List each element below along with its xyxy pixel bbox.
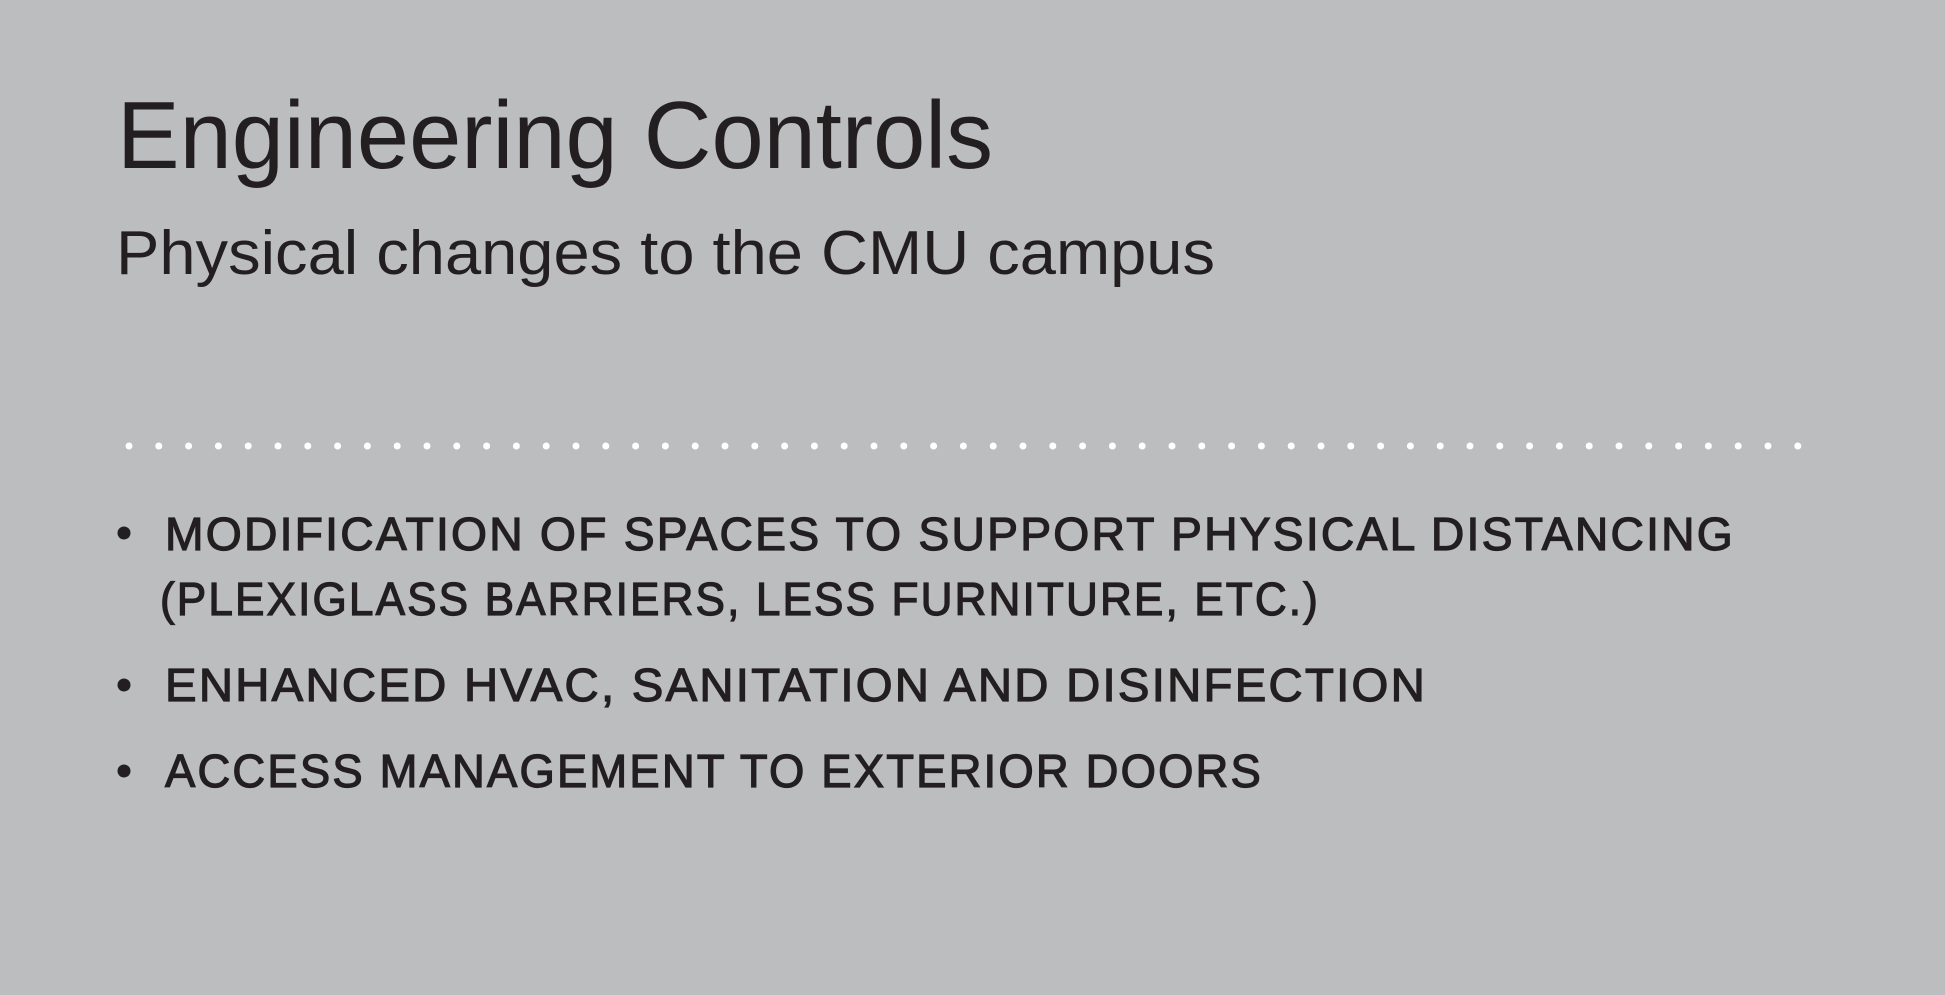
- dotted divider: [129, 442, 1800, 450]
- bullet item: access management: ACCESS MANAGEMENT TO EXTERIOR DOORS: [165, 745, 1263, 797]
- subtitle: Physical changes to the CMU campus: [116, 219, 1215, 288]
- title: Engineering Controls: [117, 82, 993, 189]
- bullet item: modification of spaces: (PLEXIGLASS BARRIERS, LESS FURNITURE, ETC.): [160, 573, 1320, 625]
- bullet item: HVAC: ENHANCED HVAC, SANITATION AND DISINFECTION: [165, 659, 1427, 711]
- bullet list: [118, 508, 1735, 797]
- bullet item: modification of spaces: MODIFICATION OF SPACES TO SUPPORT PHYSICAL DISTANCING: [165, 508, 1735, 560]
- bullet item: modification of spaces: [118, 508, 1735, 625]
